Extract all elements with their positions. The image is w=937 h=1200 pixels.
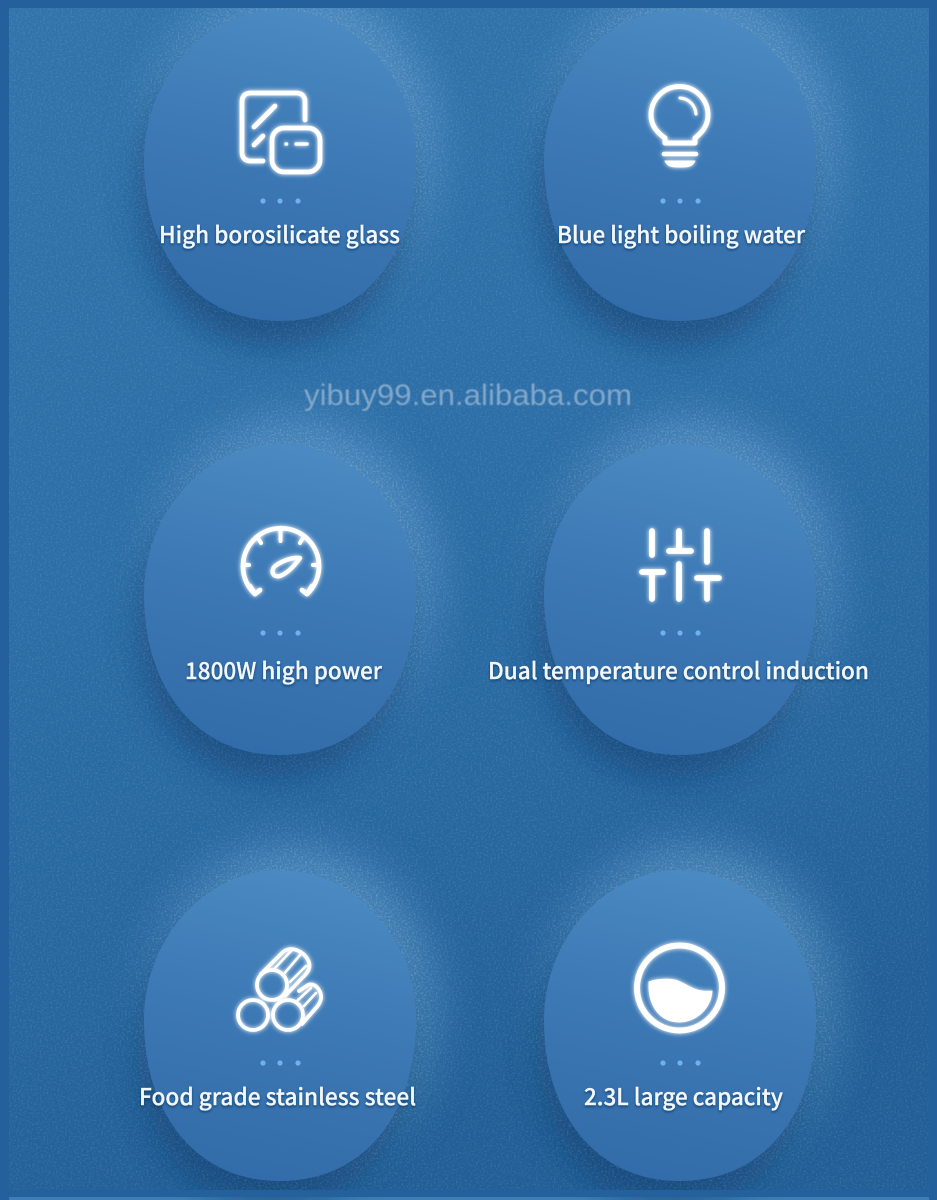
label: High borosilicate glass [159,216,400,250]
dots [660,198,701,204]
dots [660,1060,701,1066]
label: 2.3L large capacity [584,1078,783,1112]
dots [260,630,301,636]
icon: capacity circle [637,946,722,1030]
panel: food grade stainless steel [139,870,416,1181]
dots [260,198,301,204]
icon: light bulb [651,86,708,167]
panel: dual temperature control induction [488,444,869,755]
watermark: yibuy99.en.alibaba.com [304,379,632,412]
icon: control sliders [642,531,719,599]
label: 1800W high power [185,652,383,686]
icon: steel pipes [238,949,321,1030]
label: Blue light boiling water [557,216,806,250]
icon: glass panes [242,93,320,172]
label: Food grade stainless steel [139,1078,416,1112]
panel: 2.3L large capacity [544,870,816,1181]
dots [660,630,701,636]
label: Dual temperature control induction [488,652,869,686]
panel: 1800W high power [144,444,416,755]
panel: blue light boiling water [544,10,816,321]
panel: high borosilicate glass [144,10,416,321]
icon: speed gauge [243,528,319,594]
dots [260,1060,301,1066]
